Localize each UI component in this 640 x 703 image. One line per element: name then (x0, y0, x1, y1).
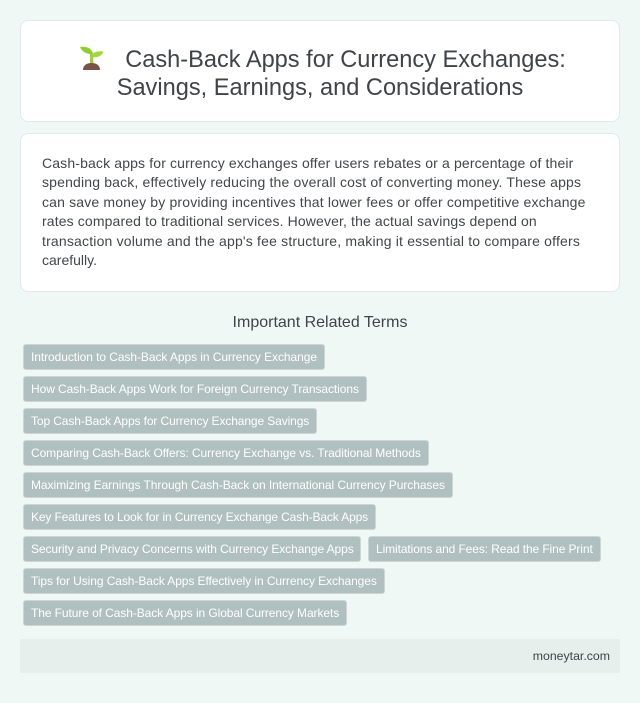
tag (23, 440, 429, 466)
related terms heading: Important Related Terms (233, 314, 407, 331)
tag (23, 504, 376, 530)
tag: Limitations and Fees: Read the Fine Print (376, 542, 593, 556)
tag (23, 376, 367, 402)
footer source: moneytar.com (533, 649, 610, 663)
icon: seedling (80, 46, 104, 70)
related terms tags (23, 344, 601, 626)
tag (23, 472, 453, 498)
tag: Introduction to Cash-Back Apps in Currency Exchange (31, 350, 317, 364)
tag: Tips for Using Cash-Back Apps Effectively in Currency Exchanges (31, 574, 377, 588)
tag (23, 568, 385, 594)
intro text (42, 155, 586, 268)
tag: Top Cash-Back Apps for Currency Exchange Savings (31, 414, 309, 428)
title text: Savings, Earnings, and Considerations (117, 75, 523, 101)
tag (23, 344, 325, 370)
tag (368, 536, 601, 562)
tag: The Future of Cash-Back Apps in Global Currency Markets (31, 606, 339, 620)
tag (23, 600, 347, 626)
tag: Key Features to Look for in Currency Exchange Cash-Back Apps (31, 510, 368, 524)
intro text: Cash-back apps for currency exchanges offer users rebates or a percentage of their (42, 155, 573, 171)
intro text: can save money by providing incentives that lower fees or offer competitive exchange (42, 194, 586, 210)
tag: Maximizing Earnings Through Cash-Back on International Currency Purchases (31, 478, 445, 492)
intro text: transaction volume and the app's fee structure, making it essential to compare offers (42, 233, 580, 249)
footer bar (20, 639, 620, 673)
tag: Comparing Cash-Back Offers: Currency Exchange vs. Traditional Methods (31, 446, 421, 460)
title text: Cash-Back Apps for Currency Exchanges: (125, 47, 566, 73)
intro panel (20, 133, 620, 292)
title card (20, 20, 620, 122)
tag (23, 536, 361, 562)
intro text: rates compared to traditional services. However, the actual savings depend on (42, 213, 537, 229)
tag: Security and Privacy Concerns with Currency Exchange Apps (31, 542, 354, 556)
title text (117, 47, 566, 101)
intro text: carefully. (42, 252, 97, 268)
intro text: spending back, effectively reducing the overall cost of converting money. These apps (42, 174, 581, 190)
tag: How Cash-Back Apps Work for Foreign Currency Transactions (31, 382, 359, 396)
tag (23, 408, 317, 434)
